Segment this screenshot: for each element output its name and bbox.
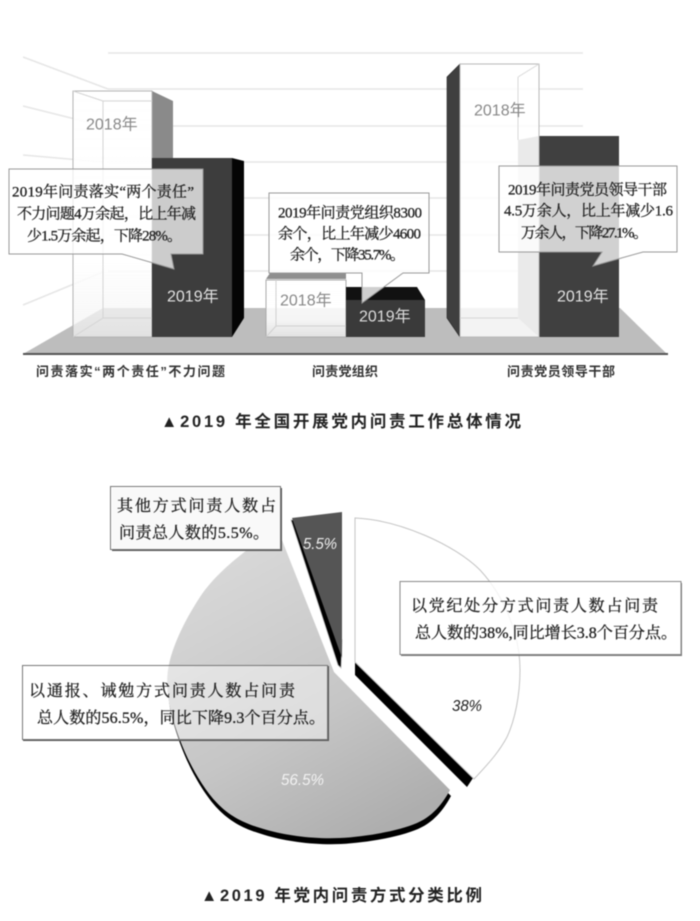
callout: notification and admonishment	[22, 666, 329, 741]
callout: first group	[9, 169, 203, 269]
heading: pie chart caption: ▲2019 年党内问责方式分类比例	[201, 885, 482, 905]
slice: 5.5%	[291, 512, 342, 668]
slice: 38%	[355, 518, 520, 787]
pie percentage labels: 38%	[452, 698, 482, 715]
bar year labels	[86, 102, 609, 326]
callout: second group: 余个，比上年减少4600	[278, 224, 421, 242]
callout: disciplinary measures: 以党纪处分方式问责人数占问责	[411, 597, 659, 615]
category labels: 问责党组织	[312, 364, 378, 379]
bar: 2018 third group	[447, 64, 539, 337]
bar year labels: 2019年	[167, 288, 219, 306]
category labels: 问责落实“两个责任”不力问题	[36, 364, 225, 379]
slice: 56.5%	[167, 535, 451, 844]
callout: notification and admonishment: 总人数的56.5%，同比下降9.3个百分点。	[37, 709, 325, 727]
heading: bar chart caption: ▲2019 年全国开展党内问责工作总体情况	[161, 411, 522, 431]
callout: other methods: 其他方式问责人数占	[117, 497, 276, 515]
bar year labels: 2018年	[280, 292, 332, 310]
callout: third group: 4.5万余人，比上年减少1.6	[504, 202, 674, 220]
bar year labels: 2019年	[359, 308, 411, 326]
callout: third group: 万余人，下降27.1%。	[521, 224, 648, 242]
category labels	[36, 364, 615, 379]
callout: disciplinary measures: 总人数的38%,同比增长3.8个百分点。	[415, 624, 677, 642]
callout: third group: 2019年问责党员领导干部	[508, 180, 667, 198]
bar year labels: 2019年	[557, 288, 609, 306]
bar: 2019 third group	[518, 136, 619, 337]
bar: 2018 second group	[266, 273, 346, 337]
bar year labels: 2018年	[86, 116, 138, 134]
bar: 2018 first group	[73, 91, 173, 337]
callout: first group: 不力问题4万余起，比上年减	[17, 204, 196, 222]
pie chart: accountability types	[22, 486, 682, 844]
chart floor	[23, 308, 668, 355]
bar year labels: 2018年	[474, 102, 526, 120]
callout: second group	[269, 193, 429, 303]
pie percentage labels: 56.5%	[281, 772, 324, 789]
callout: other methods: 问责总人数的5.5%。	[119, 524, 269, 542]
callout: third group	[499, 166, 677, 266]
category labels: 问责党员领导干部	[507, 364, 615, 379]
pie percentage labels: 5.5%	[303, 536, 337, 553]
bar chart: 2019 accountability overview	[9, 53, 677, 379]
bar: 2019 first group	[152, 158, 244, 337]
callout: disciplinary measures	[400, 582, 682, 656]
callout: first group: 少1.5万余起，下降28%。	[27, 228, 182, 244]
callout: notification and admonishment: 以通报、诫勉方式问责人数占问责	[29, 681, 296, 700]
callout: first group: 2019年问责落实“两个责任”	[12, 182, 194, 200]
callout: second group: 余个，下降35.7%。	[290, 246, 405, 264]
callout: other methods	[110, 486, 282, 551]
pie percentage labels	[281, 536, 482, 789]
callout: second group: 2019年问责党组织8300	[278, 204, 422, 222]
bar: 2019 second group	[346, 287, 425, 337]
